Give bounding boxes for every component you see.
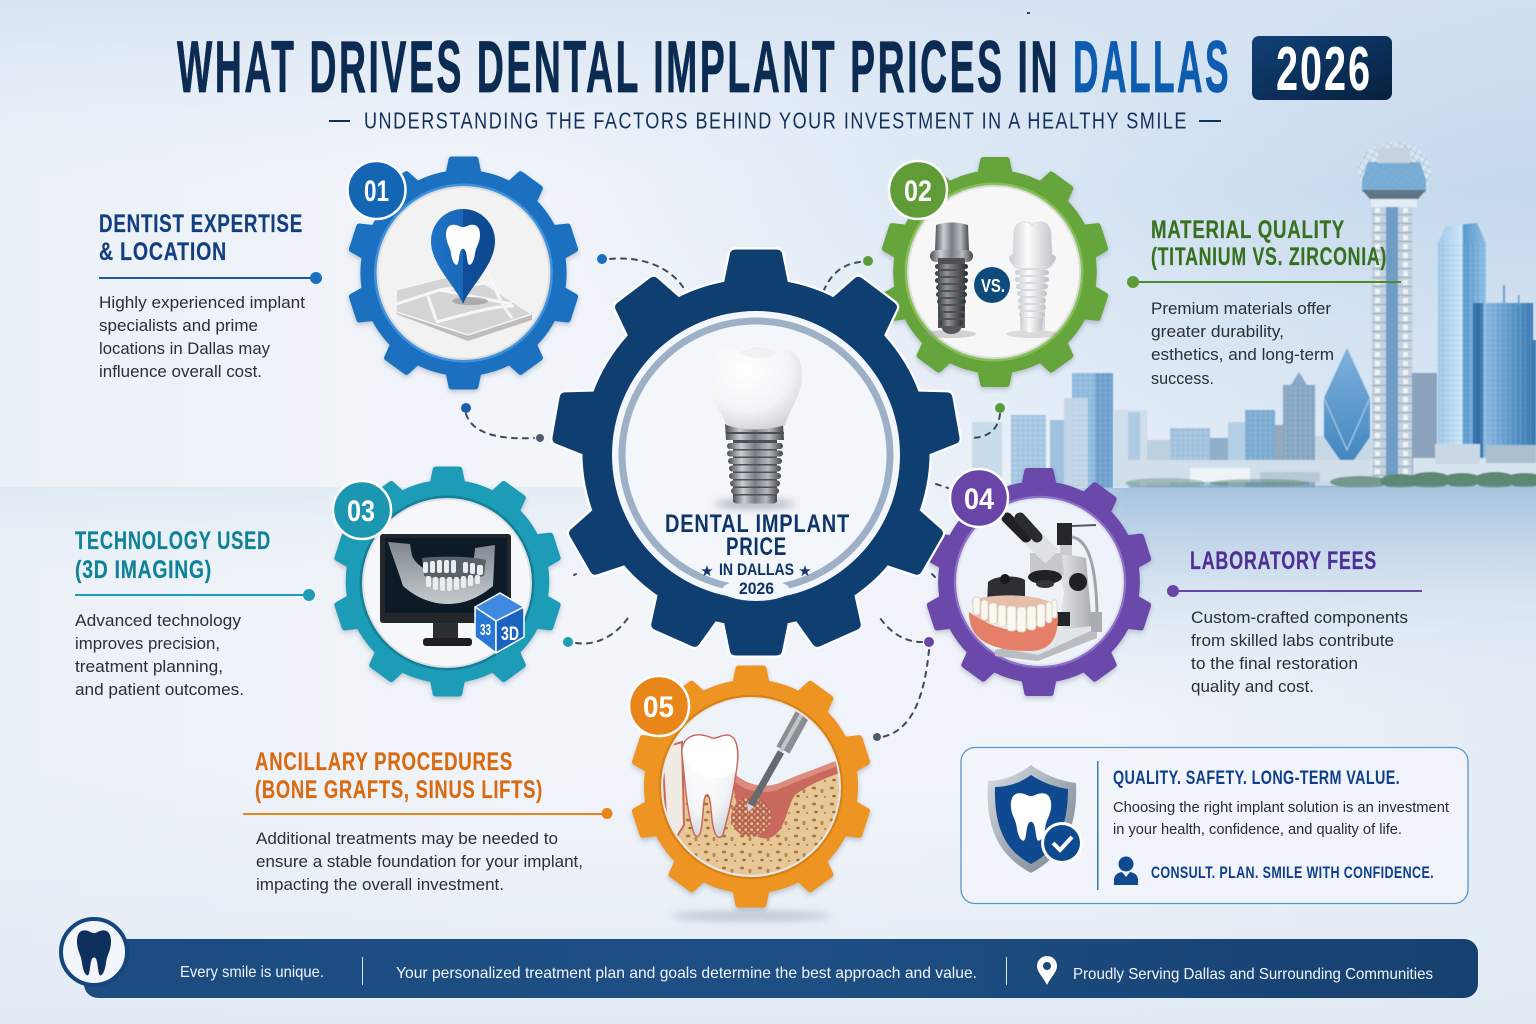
number badge 03	[333, 481, 391, 539]
heading 04: LABORATORY FEES	[1190, 547, 1377, 575]
icon: zirconia implant	[1009, 222, 1056, 332]
callout tagline: CONSULT. PLAN. SMILE WITH CONFIDENCE.	[1151, 863, 1434, 882]
icon: footer tooth	[61, 919, 127, 985]
heading 02: (TITANIUM VS. ZIRCONIA)	[1151, 243, 1387, 271]
year badge	[1252, 35, 1392, 104]
icon: titanium implant	[930, 222, 973, 334]
icon: denture	[969, 574, 1058, 651]
body 02	[1151, 300, 1334, 388]
number badge 05: 05	[643, 691, 674, 724]
panel: ancillary procedures	[243, 748, 612, 894]
body 01	[99, 294, 305, 381]
number badge 04	[950, 469, 1008, 527]
icon: 3D cube: 33	[480, 622, 491, 639]
heading 02	[1151, 216, 1387, 271]
text: DALLAS	[1073, 27, 1231, 108]
Reunion Tower	[1357, 142, 1431, 477]
number badge 03: 03	[347, 495, 375, 528]
body 02: esthetics, and long-term	[1151, 346, 1334, 364]
callout: quality safety value	[961, 748, 1468, 904]
body 01: locations in Dallas may	[99, 340, 271, 358]
number badge 05	[629, 676, 689, 736]
heading 03: (3D IMAGING)	[75, 556, 212, 584]
icon: 3D cube	[475, 593, 524, 653]
body 03	[75, 612, 244, 699]
icon: shield	[988, 765, 1083, 873]
central label: PRICE	[726, 533, 787, 561]
central label: 2026	[739, 579, 774, 598]
year badge: 2026	[1276, 35, 1372, 104]
number badge 04: 04	[964, 483, 994, 516]
body 04: to the final restoration	[1191, 655, 1358, 673]
body 02: Premium materials offer	[1151, 300, 1332, 318]
footer bar	[61, 919, 1478, 998]
heading 01: & LOCATION	[99, 238, 227, 266]
subtitle: UNDERSTANDING THE FACTORS BEHIND YOUR INVESTMENT IN A HEALTHY SMILE	[364, 108, 1188, 134]
body 03: improves precision,	[75, 635, 220, 653]
factor 05 gear	[630, 666, 872, 921]
icon: map	[396, 272, 532, 341]
body 05: impacting the overall investment.	[256, 876, 504, 894]
body 04	[1191, 609, 1408, 696]
icon: footer pin	[1037, 956, 1057, 985]
icon: dental implant	[708, 345, 802, 504]
body 03: treatment planning,	[75, 658, 223, 676]
footer text: Every smile is unique.	[180, 964, 324, 981]
connector dots	[461, 254, 1005, 741]
icon: dentist	[1114, 856, 1138, 885]
body 05: ensure a stable foundation for your implant,	[256, 853, 583, 871]
body 04: quality and cost.	[1191, 678, 1314, 696]
illustration: bone graft	[663, 711, 839, 875]
central label: IN DALLAS	[719, 560, 794, 579]
body 05	[256, 830, 583, 894]
Dallas skyline	[972, 142, 1536, 488]
central label: ★	[700, 563, 714, 580]
icon: 3D cube: 3D	[501, 624, 519, 645]
heading 03	[75, 527, 271, 584]
body 01: specialists and prime	[99, 317, 258, 335]
body 03: Advanced technology	[75, 612, 242, 630]
heading 05: (BONE GRAFTS, SINUS LIFTS)	[255, 776, 543, 804]
heading 05	[255, 748, 543, 804]
connectors	[466, 258, 1000, 737]
body 04: Custom-crafted components	[1191, 609, 1408, 627]
icon: vs badge	[974, 267, 1010, 303]
water	[1076, 488, 1536, 640]
number badge 02	[889, 161, 947, 219]
panel: dentist expertise	[99, 210, 322, 381]
callout heading: QUALITY. SAFETY. LONG-TERM VALUE.	[1113, 768, 1400, 789]
icon: location pin	[431, 209, 495, 304]
factor 03 gear	[332, 466, 563, 696]
heading 03: TECHNOLOGY USED	[75, 527, 271, 555]
panel: laboratory fees	[1167, 547, 1422, 696]
body 05: Additional treatments may be needed to	[256, 830, 558, 848]
body 03: and patient outcomes.	[75, 681, 244, 699]
icon: microscope	[995, 518, 1102, 661]
body 02: greater durability,	[1151, 323, 1284, 341]
body 01: influence overall cost.	[99, 363, 262, 381]
panel: technology used	[75, 527, 315, 699]
central label	[665, 510, 850, 598]
body 04: from skilled labs contribute	[1191, 632, 1394, 650]
central label: DENTAL IMPLANT	[665, 510, 850, 538]
callout text: in your health, confidence, and quality of life.	[1113, 821, 1402, 838]
heading 01: DENTIST EXPERTISE	[99, 210, 303, 238]
body 02: success.	[1151, 370, 1214, 388]
callout text: Choosing the right implant solution is an investment	[1113, 799, 1450, 816]
number badge 01: 01	[364, 175, 389, 208]
panel: material quality	[1127, 216, 1401, 388]
number badge 02: 02	[904, 175, 932, 208]
number badge 01	[348, 161, 406, 219]
heading 01	[99, 210, 303, 266]
central label: ★	[798, 563, 812, 580]
factor 01 gear	[347, 156, 580, 390]
heading 02: MATERIAL QUALITY	[1151, 216, 1345, 244]
body 01: Highly experienced implant	[99, 294, 305, 312]
icon: monitor with x-ray	[380, 534, 511, 646]
heading 05: ANCILLARY PROCEDURES	[255, 748, 513, 776]
icon: vs badge: VS.	[981, 276, 1005, 296]
footer bar: Proudly Serving Dallas and Surrounding Communities	[1073, 966, 1433, 983]
central gear	[550, 250, 962, 656]
factor 04 gear	[925, 468, 1153, 696]
footer bar: Your personalized treatment plan and goals determine the best approach and value.	[396, 965, 977, 982]
callout text	[1113, 799, 1450, 838]
factor 02 gear	[880, 157, 1110, 387]
